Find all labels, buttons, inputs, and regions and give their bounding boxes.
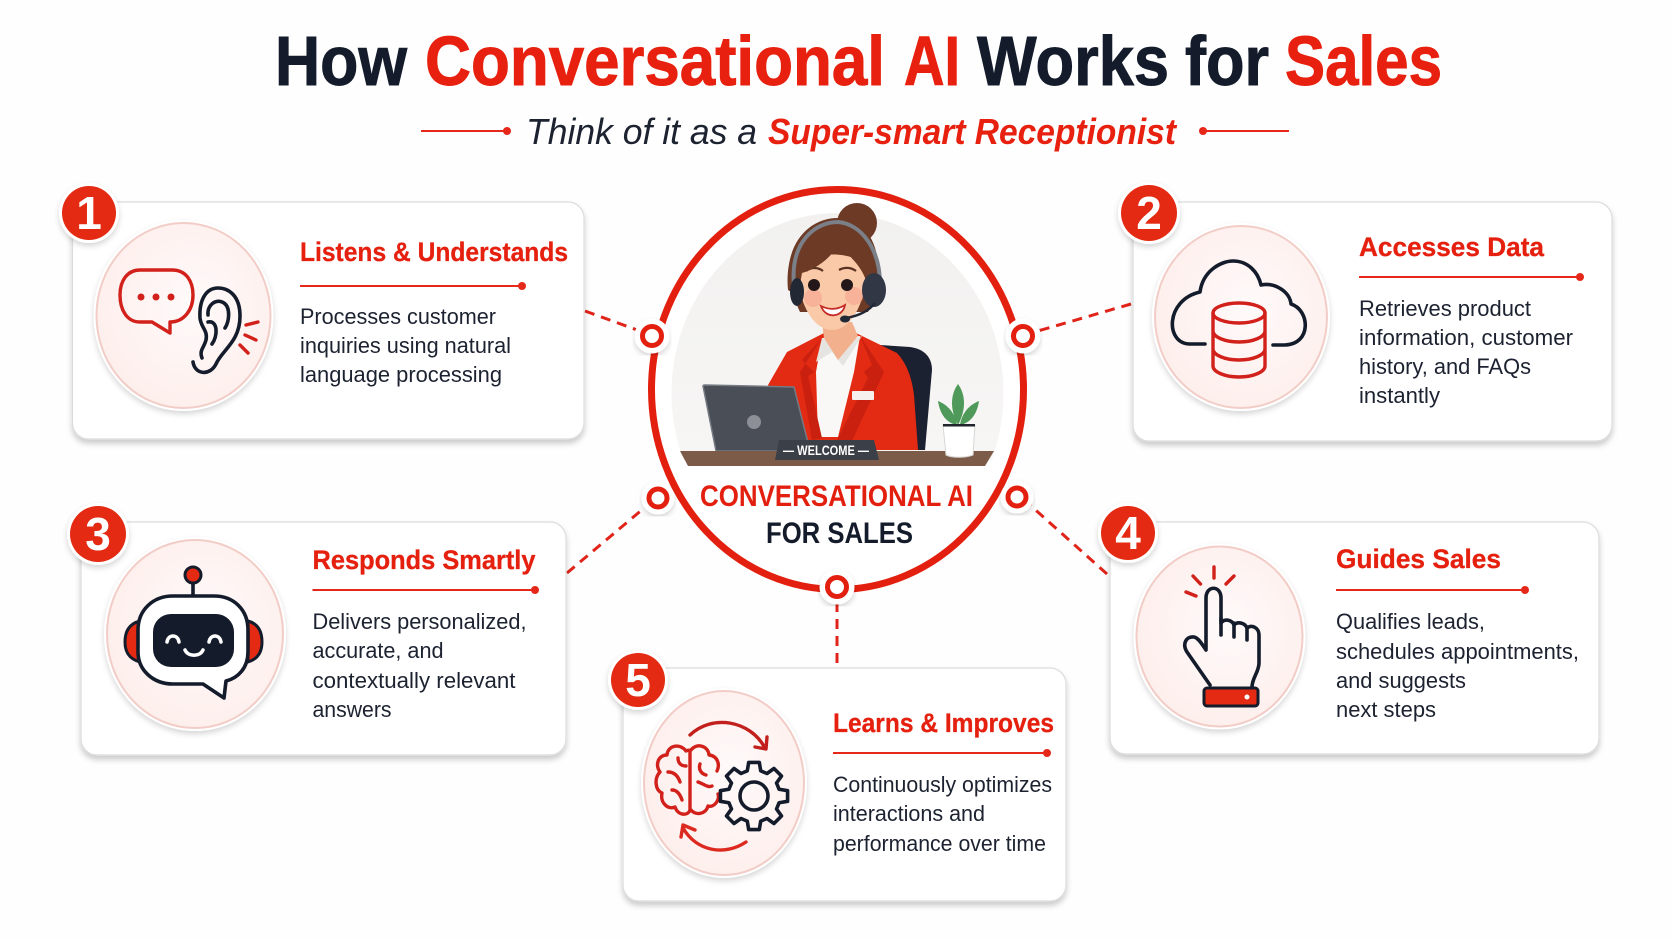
subtitle: Super-smart Receptionist: [768, 111, 1178, 152]
connector nodes: [637, 321, 1038, 602]
text 3: answers: [312, 697, 392, 722]
hub label: CONVERSATIONAL AI: [700, 480, 973, 513]
badge 4: 4: [1115, 507, 1141, 559]
text 2: information, customer: [1359, 325, 1573, 350]
text 4: and suggests: [1336, 668, 1466, 693]
text 5: [833, 772, 1052, 856]
text 4: Qualifies leads,: [1336, 609, 1485, 634]
chair: [880, 345, 932, 450]
headset: [794, 222, 880, 285]
title: AI: [904, 22, 960, 100]
hair back: [788, 218, 879, 312]
badge 2: 2: [1136, 187, 1162, 239]
neck: [822, 322, 858, 360]
heading 5: Learns & Improves: [833, 708, 1054, 738]
badge 1: [59, 183, 119, 243]
panel: 5 learns and improves: [608, 650, 1066, 901]
icon: cloud database: [1152, 223, 1330, 411]
icon: chatbot: [104, 537, 286, 731]
badge 2: [1118, 182, 1180, 244]
badge 3: [67, 503, 129, 565]
title: Sales: [1285, 22, 1442, 100]
eyes: [808, 279, 820, 291]
heading 3: Responds Smartly: [312, 545, 536, 575]
text 5: performance over time: [833, 831, 1046, 856]
hub label: FOR SALES: [766, 517, 913, 550]
heading 4: Guides Sales: [1336, 544, 1501, 574]
title: Works: [977, 22, 1169, 100]
name tag: [852, 391, 874, 400]
smile: [821, 305, 845, 315]
divider 5: [833, 749, 1051, 757]
text 1: Processes customer: [300, 304, 496, 329]
panel: 3 responds smartly: [67, 503, 566, 755]
jacket: [768, 333, 918, 450]
icon: ear and speech bubble: [94, 220, 274, 411]
fringe: [788, 219, 879, 296]
text 5: Continuously optimizes: [833, 772, 1052, 797]
title: How: [275, 22, 407, 100]
title: for: [1185, 22, 1269, 100]
text 1: [300, 304, 511, 387]
hair bun: [837, 203, 877, 243]
text 2: [1359, 296, 1573, 408]
icon: brain and gear: [641, 688, 807, 878]
divider 3: [312, 586, 539, 594]
text 4: schedules appointments,: [1336, 639, 1579, 664]
heading 1: Listens & Understands: [300, 237, 568, 267]
divider 4: [1336, 586, 1529, 594]
text 3: [312, 609, 526, 722]
badge 1: 1: [76, 187, 102, 239]
text 2: history, and FAQs: [1359, 354, 1531, 379]
icon: pointing hand: [1134, 544, 1306, 730]
central hub: [652, 190, 1024, 590]
face: [798, 254, 866, 330]
text 4: [1336, 609, 1579, 722]
shirt: [816, 336, 860, 437]
subtitle: [421, 111, 1289, 152]
title: [275, 22, 1442, 100]
text 2: Retrieves product: [1359, 296, 1532, 321]
badge 5: [608, 650, 668, 710]
text 1: language processing: [300, 362, 502, 387]
badge 3: 3: [85, 508, 111, 560]
text 1: inquiries using natural: [300, 333, 511, 358]
badge 5: 5: [625, 654, 651, 706]
heading 2: Accesses Data: [1359, 232, 1545, 262]
laptop: [703, 385, 810, 451]
plant: [938, 384, 979, 425]
divider 2: [1359, 273, 1584, 281]
text 3: Delivers personalized,: [312, 609, 526, 634]
title: Conversational: [425, 22, 885, 100]
panel: 4 guides sales: [1098, 503, 1599, 754]
hub label: [700, 480, 973, 550]
divider 1: [300, 282, 526, 290]
text 4: next steps: [1336, 697, 1436, 722]
welcome sign: [775, 440, 879, 460]
text 5: interactions and: [833, 801, 985, 826]
desk: [680, 451, 994, 466]
panel: 2 accesses data: [1118, 182, 1612, 441]
panel: 1 listens and understands: [59, 183, 584, 439]
welcome sign: — WELCOME —: [783, 442, 869, 458]
badge 4: [1098, 503, 1158, 563]
lapels: [800, 336, 884, 445]
receptionist illustration: [672, 203, 1004, 466]
text 3: contextually relevant: [312, 668, 516, 693]
text 2: instantly: [1359, 383, 1441, 408]
text 3: accurate, and: [312, 638, 444, 663]
subtitle: Think of it as a: [526, 111, 757, 152]
connector lines: [567, 304, 1131, 668]
